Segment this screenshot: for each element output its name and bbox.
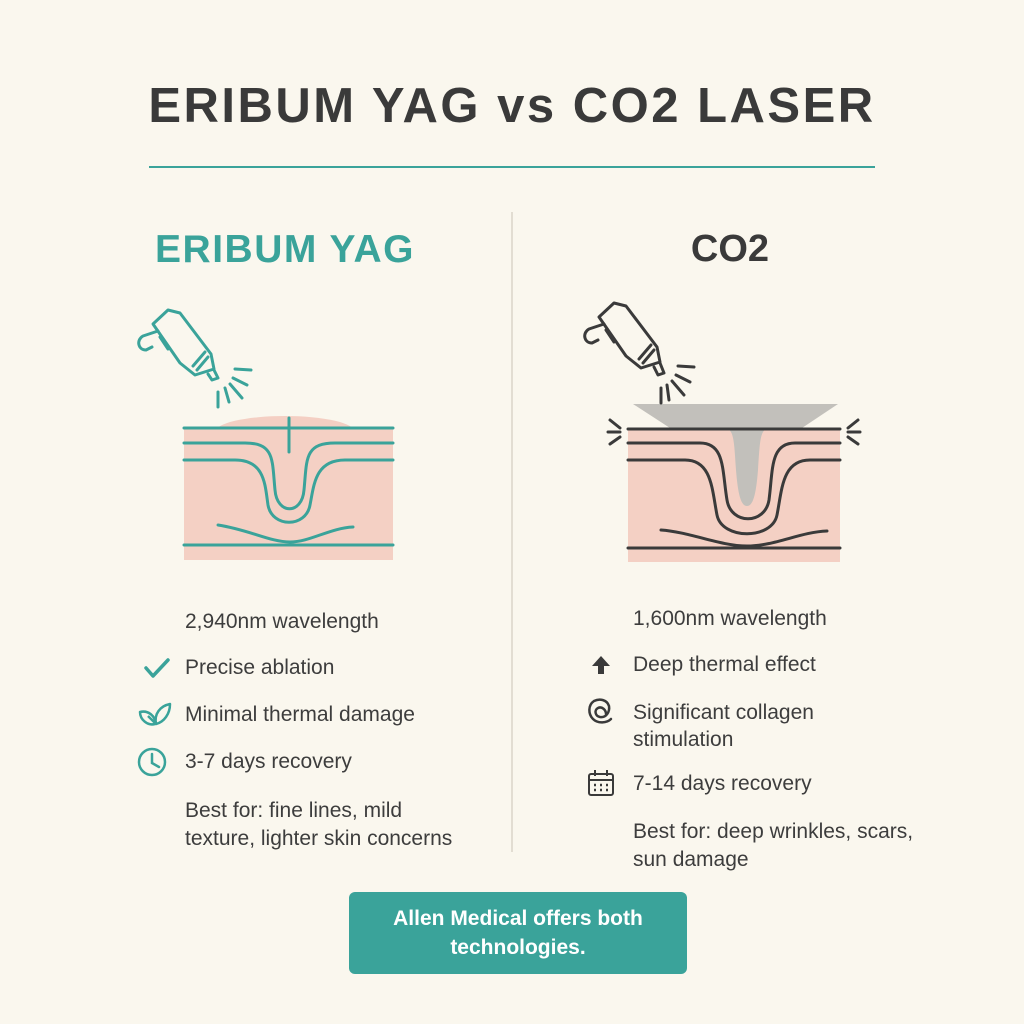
text: erbium list [185, 610, 452, 850]
text: sun damage [633, 848, 749, 871]
text: Best for: fine lines, mild [185, 799, 402, 822]
icon: clock [139, 749, 165, 775]
icon: checkmark [146, 660, 168, 676]
text: 2,940nm wavelength [185, 610, 379, 633]
icon: up arrow [592, 656, 610, 674]
text: Precise ablation [185, 656, 334, 679]
icon: leaf [140, 704, 170, 724]
icon: spiral [589, 700, 611, 722]
heading: eribum yag: ERIBUM YAG [155, 228, 415, 271]
icon: erbium handpiece [139, 310, 251, 407]
callout button: Allen Medical offers both [393, 907, 643, 930]
illustration: co2 laser on skin [585, 303, 860, 562]
text: 1,600nm wavelength [633, 607, 827, 630]
title underline [149, 166, 875, 168]
text: 7-14 days recovery [633, 772, 812, 795]
text: texture, lighter skin concerns [185, 827, 452, 850]
heading: co2: CO2 [691, 228, 769, 270]
icon: calendar [589, 770, 613, 795]
text: Deep thermal effect [633, 653, 816, 676]
text: Minimal thermal damage [185, 703, 415, 726]
text: Best for: deep wrinkles, scars, [633, 820, 913, 843]
callout button [349, 892, 687, 974]
text: Significant collagen [633, 701, 814, 724]
icon: co2 handpiece [585, 303, 694, 403]
text: stimulation [633, 728, 733, 751]
text: 3-7 days recovery [185, 750, 352, 773]
text: co2 list [633, 607, 913, 871]
center divider [511, 212, 513, 852]
title: ERIBUM YAG vs CO2 LASER [148, 79, 876, 133]
callout button: technologies. [450, 936, 586, 959]
